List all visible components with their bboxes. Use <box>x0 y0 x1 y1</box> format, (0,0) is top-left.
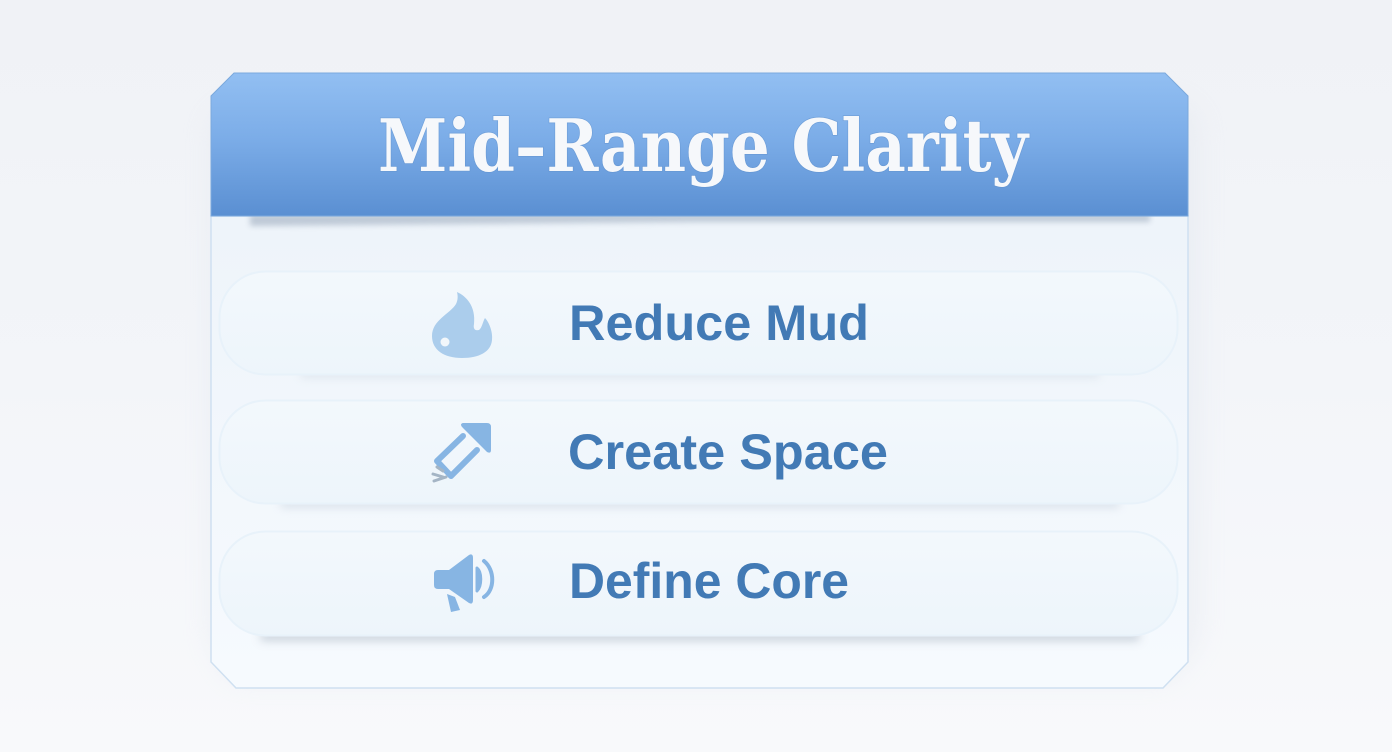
panel: row Create Space <box>220 400 1178 508</box>
label: Define Core <box>569 553 849 609</box>
card shadow <box>210 100 1200 680</box>
icon: flame <box>432 292 492 358</box>
panel: row Reduce Mud <box>220 272 1178 378</box>
icon: megaphone <box>434 554 492 612</box>
title: Mid–Range Clarity <box>378 103 1030 188</box>
label: Create Space <box>568 424 888 480</box>
header shadow <box>250 214 1150 226</box>
panel: card body <box>211 216 1188 688</box>
panel: header banner <box>211 73 1188 216</box>
icon: rocket arrow <box>433 423 491 481</box>
label: Reduce Mud <box>569 295 869 351</box>
panel: row Define Core <box>220 532 1178 641</box>
